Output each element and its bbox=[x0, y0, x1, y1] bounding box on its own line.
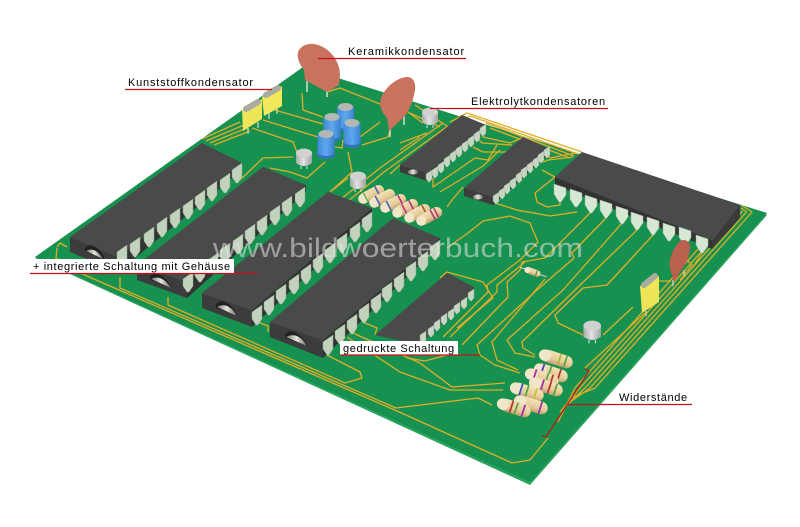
label: Widerstände with bracket bbox=[542, 369, 692, 437]
watermark: www.bildwoerterbuch.com bbox=[212, 233, 583, 263]
ceramic capacitor 3 bbox=[670, 240, 690, 286]
resistors: lower-right group bbox=[495, 347, 574, 419]
integrated circuit: chip 5 bbox=[375, 273, 474, 345]
label: Keramikkondensator: Keramikkondensator bbox=[348, 46, 465, 58]
electrolytic capacitors: silver bbox=[296, 108, 601, 343]
ceramic capacitor 2 bbox=[380, 77, 415, 137]
plastic capacitors bbox=[242, 86, 282, 134]
label: integrierte Schaltung mit Gehäuse: + integrierte Schaltung mit Gehäuse bbox=[33, 261, 231, 273]
label: gedruckte Schaltung bbox=[340, 341, 480, 355]
upper board edge traces bbox=[410, 113, 582, 158]
electrolytic capacitors: blue bbox=[317, 103, 361, 159]
integrated circuit: chip 4 bbox=[270, 218, 440, 358]
right-hand bus traces bbox=[573, 205, 752, 397]
resistor: single bbox=[519, 264, 548, 280]
ceramic capacitor 1 bbox=[298, 44, 340, 97]
integrated circuit: chip 8 bbox=[554, 152, 740, 253]
label: Elektrolytkondensatoren: Elektrolytkondensatoren bbox=[471, 96, 606, 108]
integrated circuit: chip 6 bbox=[400, 115, 486, 182]
label: gedruckte Schaltung: gedruckte Schaltung bbox=[343, 343, 455, 355]
chip 8 fan-out traces bbox=[443, 216, 538, 337]
integrated circuit: chip 2 bbox=[137, 167, 306, 298]
label: Widerstände with bracket: Widerstände bbox=[619, 392, 688, 404]
resistors: upper group bbox=[356, 183, 444, 228]
plastic capacitor, right bbox=[640, 276, 659, 316]
printed circuit traces bbox=[56, 88, 752, 463]
top-left traces bbox=[202, 122, 250, 145]
integrated circuit: chip 3 bbox=[202, 192, 372, 327]
centre-lower traces bbox=[353, 333, 505, 387]
integrated circuit: chip 7 bbox=[464, 137, 550, 205]
lower-left bus traces bbox=[56, 243, 548, 463]
label: Kunststoffkondensator: Kunststoffkondensator bbox=[128, 77, 254, 89]
integrated circuit: chip 1 bbox=[70, 143, 242, 272]
circuit board bbox=[35, 67, 767, 485]
